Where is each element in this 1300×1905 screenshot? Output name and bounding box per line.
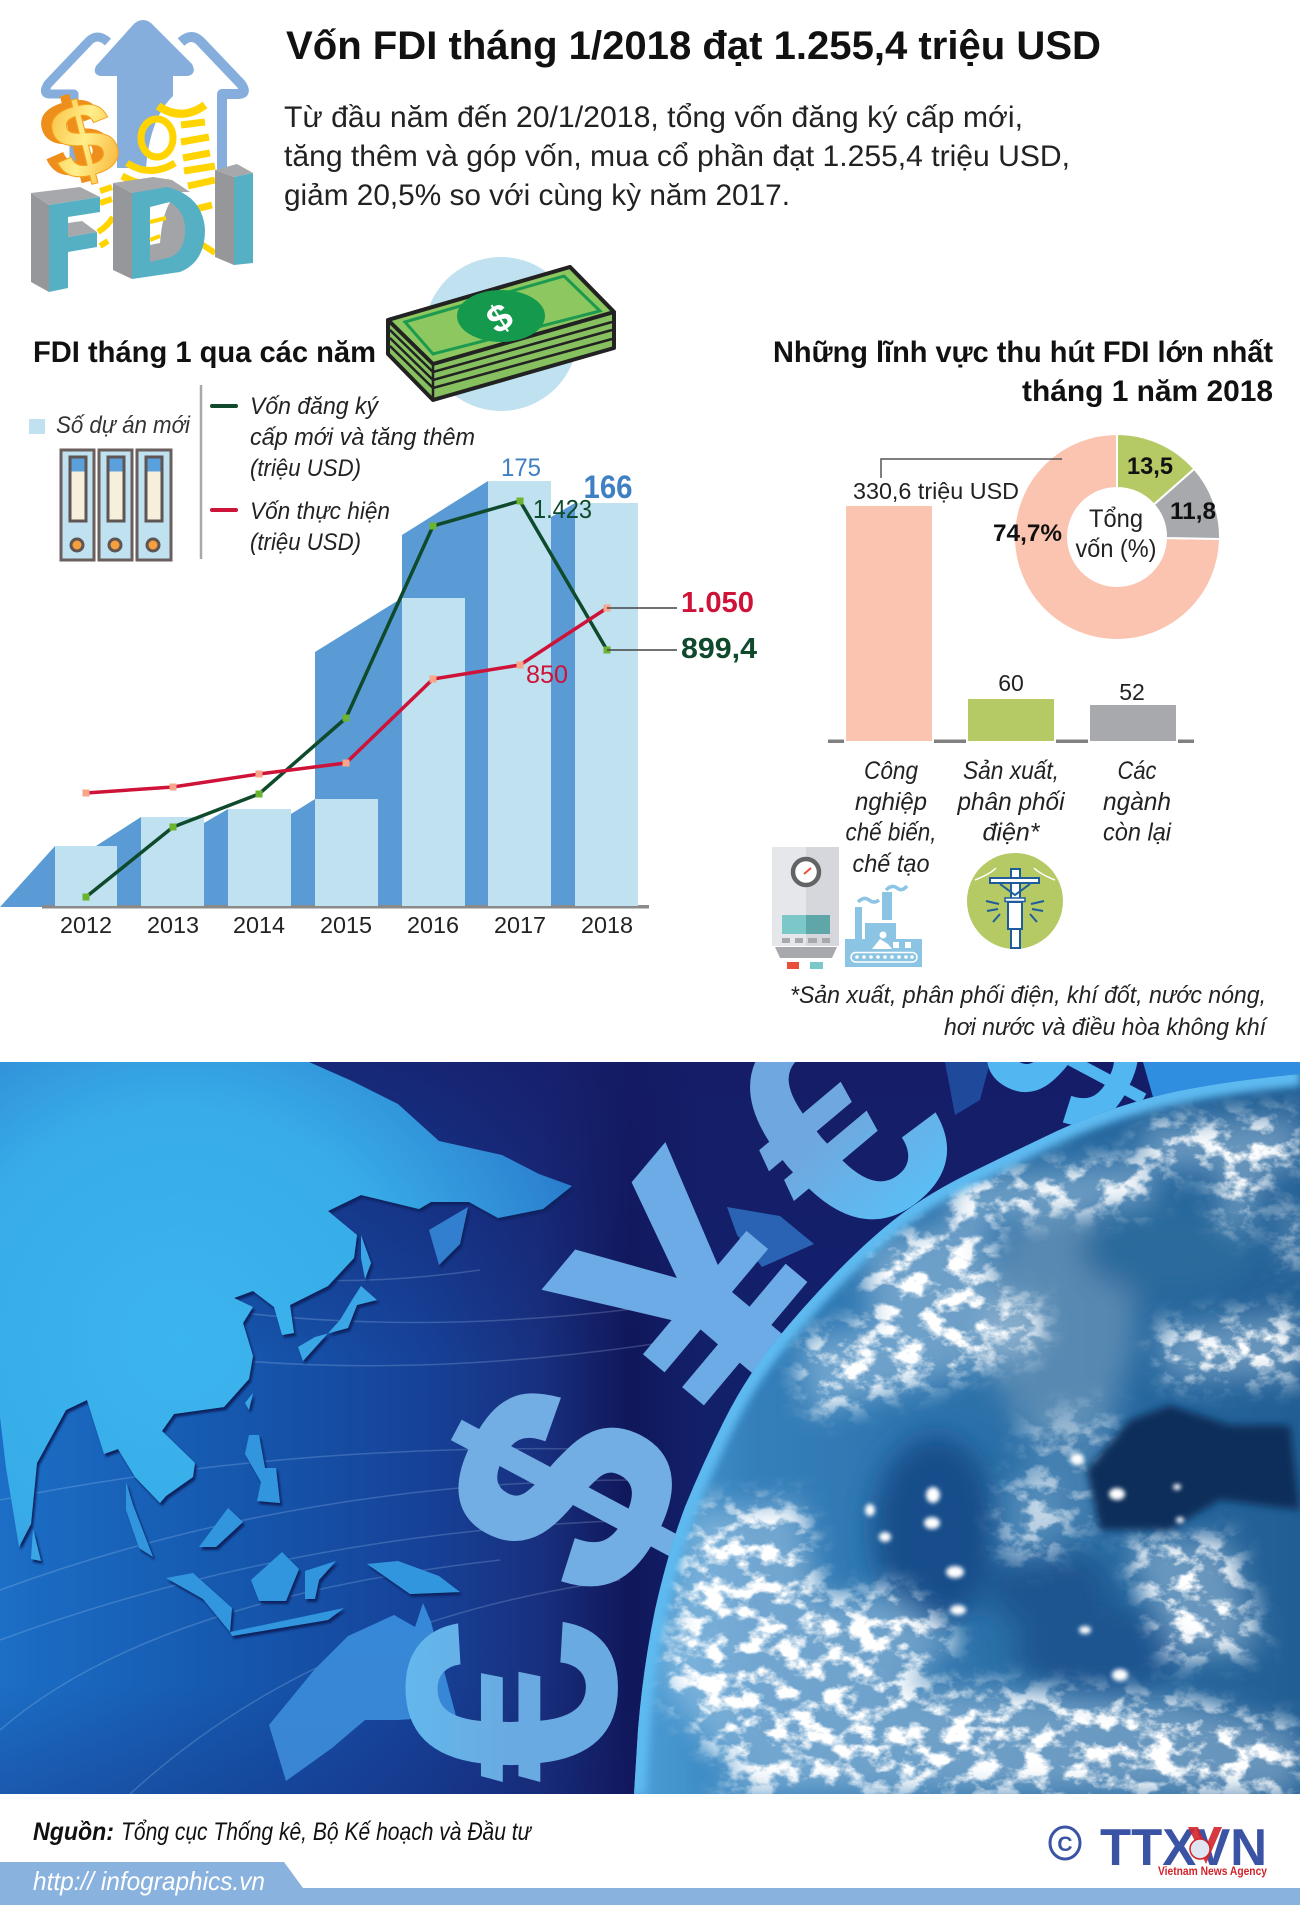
category labels: chế biến, — [846, 818, 936, 846]
chart: donut of total capital: vốn (%) — [1076, 535, 1156, 563]
year labels: 2018 — [581, 912, 633, 938]
year labels: 2014 — [233, 912, 285, 938]
photo: world map, currency symbols and earth — [0, 1062, 1300, 1794]
icon: electricity pole — [967, 853, 1063, 949]
year labels: 2016 — [407, 912, 459, 938]
category labels: Sản xuất, — [963, 757, 1059, 785]
icon: stack of money — [388, 257, 614, 411]
source line: Nguồn: — [33, 1818, 114, 1846]
chart: sector bars: 52 — [1119, 679, 1145, 705]
heading: sectors — [773, 336, 1273, 408]
intro text: giảm 20,5% so với cùng kỳ năm 2017. — [284, 179, 790, 212]
intro text: Từ đầu năm đến 20/1/2018, tổng vốn đăng ký cấp mới, — [284, 101, 1023, 134]
legend: registered capital line: (triệu USD) — [250, 455, 361, 482]
icon: boiler — [772, 847, 839, 969]
year labels — [60, 912, 633, 938]
icon: right up arrow — [181, 37, 244, 170]
value labels: 899,4 — [681, 633, 757, 665]
icon: left up arrow — [45, 37, 108, 165]
currency symbol: dollar top right: $ — [924, 944, 1199, 1168]
logo: TTXVN: TTXVN — [1100, 1819, 1267, 1877]
title: Vốn FDI tháng 1/2018 đạt 1.255,4 triệu USD — [286, 24, 1101, 68]
logo: TTXVN: Vietnam News Agency — [1158, 1864, 1267, 1878]
legend: registered capital line — [210, 393, 475, 482]
legend: disbursed capital line: Vốn thực hiện — [250, 498, 390, 525]
category labels — [846, 757, 1172, 878]
category labels: Các — [1118, 757, 1157, 785]
year labels: 2013 — [147, 912, 199, 938]
category labels: chế tạo — [852, 850, 930, 878]
category labels: Công — [864, 757, 918, 785]
chart: donut of total capital: Tổng — [1089, 505, 1143, 533]
category labels: điện* — [982, 818, 1041, 846]
value labels — [501, 454, 757, 689]
heading: sectors: tháng 1 năm 2018 — [1022, 375, 1273, 408]
map: Australia — [269, 1603, 456, 1781]
source line: Tổng cục Thống kê, Bộ Kế hoạch và Đầu tư — [121, 1818, 533, 1846]
chart: FDI by year bars and lines — [0, 454, 757, 938]
currency symbol: euro bottom: € — [343, 1617, 679, 1783]
icon: factory — [845, 886, 922, 967]
chart: donut of total capital — [993, 434, 1220, 640]
value labels: 850 — [526, 661, 568, 689]
icon: letter D — [113, 177, 205, 279]
category labels: nghiệp — [855, 788, 927, 816]
illustration: FDI logo — [29, 20, 253, 292]
legend: registered capital line: cấp mới và tăng thêm — [250, 424, 475, 451]
category labels: còn lại — [1103, 818, 1172, 846]
legend: registered capital line: Vốn đăng ký — [250, 393, 380, 420]
map: Sakhalin, Japan and nearby islands — [31, 1207, 468, 1561]
category labels: phân phối — [957, 788, 1066, 816]
icon: centre up arrow — [95, 20, 194, 168]
year labels: 2015 — [320, 912, 372, 938]
footer band with website — [0, 1862, 1300, 1905]
chart: donut of total capital: 11,8 — [1170, 498, 1216, 525]
legend: new projects: Số dự án mới — [56, 412, 191, 439]
dark gulf — [1087, 1405, 1300, 1530]
footnote: hơi nước và điều hòa không khí — [944, 1014, 1268, 1041]
chart: donut of total capital: 13,5 — [1127, 453, 1173, 480]
icon: letter F — [31, 187, 100, 292]
icon: gold dollar sign: $ — [29, 72, 121, 203]
intro text — [284, 101, 1070, 212]
line: disbursed capital — [82, 604, 610, 796]
footnote — [790, 982, 1268, 1041]
currency symbol: euro top: € — [662, 935, 1017, 1312]
value labels: 175 — [501, 454, 541, 482]
icon: binders — [61, 450, 171, 560]
line: registered capital — [82, 498, 610, 900]
heading: sectors: Những lĩnh vực thu hút FDI lớn nhất — [773, 336, 1273, 369]
legend: disbursed capital line — [210, 498, 390, 556]
chart: sector bars: 330,6 triệu USD — [853, 478, 1019, 504]
footnote: *Sản xuất, phân phối điện, khí đốt, nước nóng, — [790, 982, 1266, 1009]
icon: stack of money: $ — [479, 295, 521, 342]
chart: sector bars: 60 — [998, 670, 1024, 696]
leader line: bar to donut — [881, 459, 1062, 478]
icon: gold coins — [98, 105, 215, 253]
bars: new projects — [55, 481, 638, 906]
map fragments behind symbols — [727, 1062, 1300, 1267]
logo: TTXVN: C — [1057, 1833, 1073, 1856]
intro text: tăng thêm và góp vốn, mua cổ phần đạt 1.255,4 triệu USD, — [284, 140, 1070, 173]
icon: gold dollar sign: $ — [38, 75, 130, 206]
value labels: 1.423 — [533, 494, 592, 524]
category labels: ngành — [1103, 788, 1171, 816]
legend: disbursed capital line: (triệu USD) — [250, 529, 361, 556]
footer band with website: http:// infographics.vn — [33, 1866, 265, 1896]
scattered small clouds — [865, 1453, 1184, 1681]
map: South-East Asia islands — [126, 1435, 460, 1636]
chart: sector bars — [828, 478, 1194, 743]
earth — [620, 1062, 1300, 1794]
map: Asia — [0, 1062, 572, 1547]
icon: letter I — [215, 164, 253, 265]
currency symbol: yen: ¥ — [488, 1096, 902, 1487]
year labels: 2017 — [494, 912, 546, 938]
value labels: 1.050 — [681, 587, 754, 619]
year labels: 2012 — [60, 912, 112, 938]
heading: FDI by year: FDI tháng 1 qua các năm — [33, 336, 376, 369]
currency symbol: dollar: $ — [376, 1335, 751, 1640]
value labels: 166 — [584, 469, 632, 505]
chart: donut of total capital: 74,7% — [993, 520, 1062, 547]
